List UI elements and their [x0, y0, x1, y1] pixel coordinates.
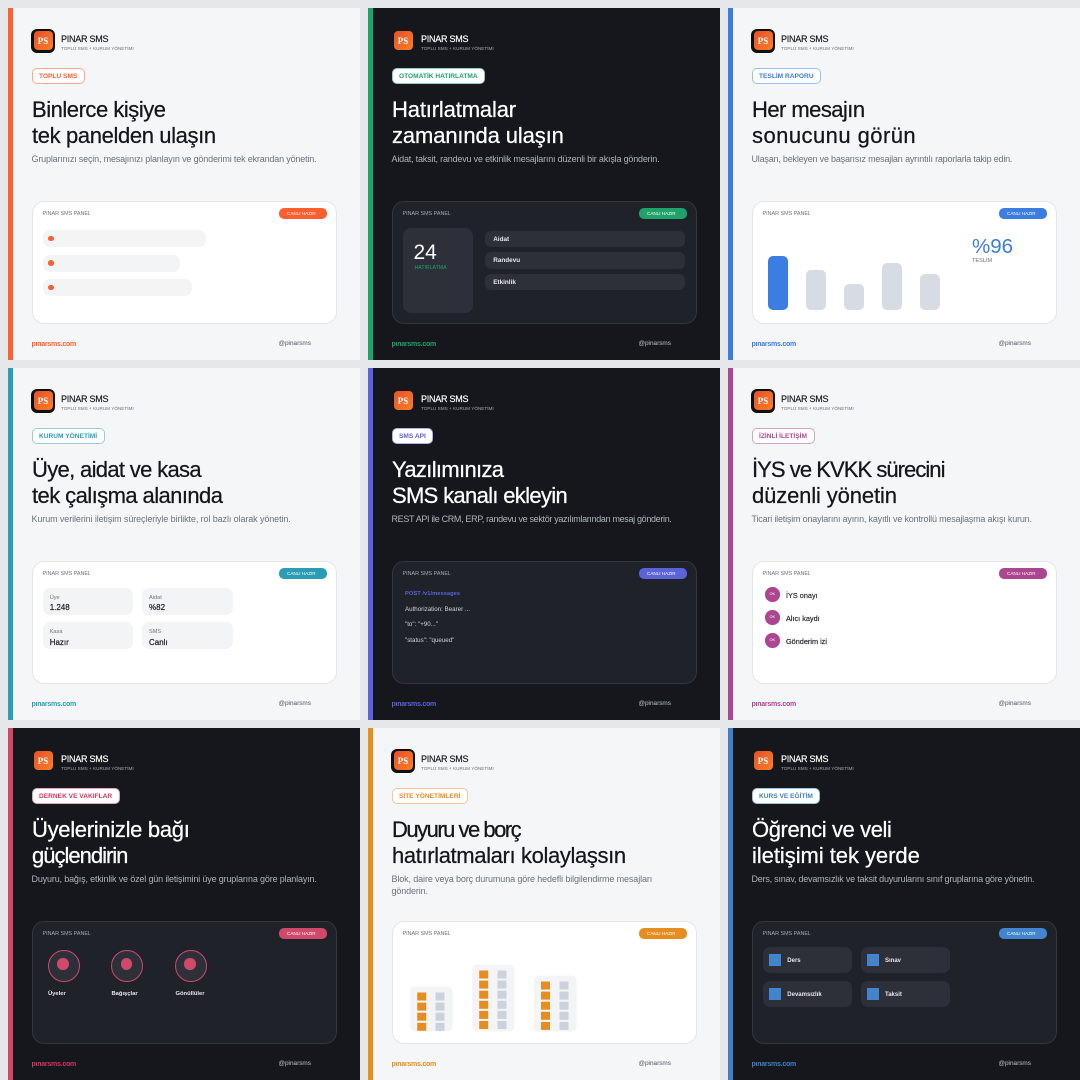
social handle: @pinarsms	[638, 340, 671, 347]
heading: Üye, aidat ve kasa	[32, 457, 201, 482]
heading	[752, 817, 920, 868]
panel: delivery chart	[752, 200, 1056, 324]
reminder counter: 24	[414, 241, 437, 264]
topic: taksit	[861, 981, 950, 1007]
code: authorization: Authorization: Bearer ...	[405, 606, 470, 612]
heading: hatırlatmaları kolaylaşsın	[392, 843, 626, 868]
logo: PS	[398, 36, 408, 46]
logo	[391, 748, 415, 772]
group icon 1	[48, 950, 80, 982]
stat: uye: Üye	[50, 595, 60, 601]
heading: güçlendirin	[32, 843, 127, 868]
tag: İZİNLİ İLETİŞİM	[759, 433, 807, 440]
building 1	[410, 986, 452, 1031]
reminder row: etkinlik	[485, 274, 685, 290]
check icon 3: OK	[770, 638, 775, 642]
heading	[392, 457, 567, 508]
tag	[392, 788, 468, 804]
brand subtitle: TOPLU SMS + KURUM YÖNETİMİ	[61, 406, 134, 410]
tag	[392, 428, 433, 444]
card: site yonetimleri	[368, 728, 720, 1080]
stat: aidat: %82	[149, 603, 165, 612]
heading: tek çalışma alanında	[32, 483, 222, 508]
description: Ders, sınav, devamsızlık ve taksit duyurularını sınıf gruplarına göre yönetin.	[752, 874, 1034, 884]
brand name: PINAR SMS	[61, 394, 108, 404]
tag: OTOMATİK HATIRLATMA	[399, 73, 478, 80]
status badge: CANLI HAZIR	[287, 930, 316, 936]
brand subtitle: TOPLU SMS + KURUM YÖNETİMİ	[781, 766, 854, 770]
description: Ticari iletişim onaylarını ayırın, kayıtlı ve kontrollü mesajlaşma akışı kurun.	[752, 514, 1032, 524]
card: dernek ve vakiflar	[8, 728, 360, 1080]
card: toplu sms	[8, 8, 360, 360]
list row 1	[43, 230, 206, 247]
heading: Hatırlatmalar	[392, 97, 516, 122]
code: recipient: "to": "+90..."	[405, 621, 438, 628]
logo: PS	[398, 756, 408, 766]
card: kurum yonetimi	[8, 368, 360, 720]
heading: SMS kanalı ekleyin	[392, 483, 567, 508]
list row 3	[43, 279, 192, 296]
description: Duyuru, bağış, etkinlik ve özel gün iletişimini üye gruplarına göre planlayın.	[32, 874, 317, 884]
status badge: CANLI HAZIR	[1007, 210, 1036, 216]
tag	[32, 428, 105, 444]
website: pınarsms.com	[32, 700, 76, 708]
panel label: PINAR SMS PANEL	[762, 571, 811, 577]
website: pınarsms.com	[752, 1060, 796, 1068]
brand name: PINAR SMS	[421, 754, 468, 764]
tag: TOPLU SMS	[39, 73, 77, 80]
brand subtitle: TOPLU SMS + KURUM YÖNETİMİ	[421, 766, 494, 770]
group label 3: Gönüllüler	[176, 991, 204, 997]
heading: Duyuru ve borç	[392, 817, 520, 842]
social handle: @pinarsms	[638, 1060, 671, 1067]
status badge	[639, 928, 686, 938]
brand subtitle: TOPLU SMS + KURUM YÖNETİMİ	[781, 46, 854, 50]
brand subtitle: TOPLU SMS + KURUM YÖNETİMİ	[421, 406, 494, 410]
tag	[752, 68, 821, 84]
check icon 1	[765, 587, 780, 602]
status badge: CANLI HAZIR	[287, 570, 316, 576]
group label 2: Bağışçlar	[112, 991, 138, 997]
tag: KURUM YÖNETİMİ	[39, 433, 97, 440]
social handle: @pinarsms	[638, 700, 671, 707]
panel: buildings	[392, 920, 696, 1044]
website: pınarsms.com	[392, 1060, 436, 1068]
tag	[752, 428, 814, 444]
check icon 2: OK	[770, 615, 775, 619]
status badge: CANLI HAZIR	[1007, 930, 1036, 936]
topic: sinav: Sınav	[885, 958, 901, 964]
website: pınarsms.com	[32, 340, 76, 348]
description: Ulaşan, bekleyen ve başarısız mesajları ayrıntılı raporlarla takip edin.	[752, 154, 1012, 164]
heading	[32, 457, 224, 508]
brand name: PINAR SMS	[781, 754, 828, 764]
logo: PS	[38, 756, 48, 766]
building 3	[534, 975, 576, 1031]
heading: Binlerce kişiye	[32, 97, 166, 122]
description: Blok, daire veya borç durumuna göre hedefli bilgilendirme mesajları	[392, 874, 652, 884]
code: status: "status": "queued"	[405, 637, 454, 644]
status badge: CANLI HAZIR	[1007, 570, 1036, 576]
check icon 3	[765, 633, 780, 648]
reminder counter: HATIRLATMA	[414, 264, 447, 270]
heading	[752, 97, 916, 148]
status badge	[279, 928, 326, 938]
topic: devamsizlik	[763, 981, 852, 1007]
social handle: @pinarsms	[998, 1060, 1031, 1067]
heading: Öğrenci ve veli	[752, 817, 892, 842]
heading	[32, 97, 216, 148]
stat: uye	[43, 588, 133, 615]
stat: kasa: Kasa	[50, 629, 62, 635]
logo: PS	[758, 396, 768, 406]
panel: topics	[752, 920, 1056, 1044]
description: Aidat, taksit, randevu ve etkinlik mesajlarını düzenli bir akışla gönderin.	[392, 154, 659, 164]
heading: tek panelden ulaşın	[32, 123, 216, 148]
heading	[392, 97, 564, 148]
card: sms api	[368, 368, 720, 720]
tag	[32, 68, 85, 84]
panel label: PINAR SMS PANEL	[762, 211, 811, 217]
reminder row: randevu	[485, 252, 685, 268]
bar 3	[844, 284, 864, 310]
logo	[391, 388, 415, 412]
reminder row: randevu: Randevu	[493, 257, 520, 264]
heading	[392, 817, 626, 868]
brand subtitle: TOPLU SMS + KURUM YÖNETİMİ	[61, 46, 134, 50]
panel: api code	[392, 560, 696, 684]
heading	[32, 817, 190, 868]
status badge	[999, 208, 1046, 218]
brand subtitle: TOPLU SMS + KURUM YÖNETİMİ	[61, 766, 134, 770]
heading: Her mesajın	[752, 97, 865, 122]
social handle: @pinarsms	[278, 1060, 311, 1067]
bar 2	[806, 270, 826, 310]
topic: ders: Ders	[787, 958, 801, 964]
panel label: PINAR SMS PANEL	[42, 211, 91, 217]
logo	[751, 388, 775, 412]
topic: taksit: Taksit	[885, 992, 902, 998]
panel label: PINAR SMS PANEL	[402, 931, 451, 937]
card: kurs ve egitim	[728, 728, 1080, 1080]
brand name: PINAR SMS	[781, 34, 828, 44]
status badge	[639, 208, 686, 218]
heading: düzenli yönetin	[752, 483, 897, 508]
tag: DERNEK VE VAKIFLAR	[39, 793, 112, 800]
code: endpoint: POST /v1/messages	[405, 591, 460, 597]
tag	[752, 788, 820, 804]
topic: sinav	[861, 947, 950, 973]
logo	[751, 748, 775, 772]
card: otomatik hatirlatma	[368, 8, 720, 360]
panel: message list	[32, 200, 336, 324]
card: teslim raporu	[728, 8, 1080, 360]
bar 4	[882, 263, 902, 310]
tag	[32, 788, 120, 804]
panel label: PINAR SMS PANEL	[402, 571, 451, 577]
group icon 3	[174, 950, 206, 982]
description: Gruplarınızı seçin, mesajınızı planlayın ve gönderimi tek ekrandan yönetin.	[32, 154, 316, 164]
group icon 2	[111, 950, 143, 982]
topic: ders	[763, 947, 852, 973]
brand subtitle: TOPLU SMS + KURUM YÖNETİMİ	[421, 46, 494, 50]
description: REST API ile CRM, ERP, randevu ve sektör yazılımlarından mesaj gönderin.	[392, 514, 672, 524]
logo	[391, 28, 415, 52]
status badge	[999, 568, 1046, 578]
logo: PS	[38, 396, 48, 406]
brand name: PINAR SMS	[61, 34, 108, 44]
logo	[31, 748, 55, 772]
website: pınarsms.com	[392, 340, 436, 348]
status badge: CANLI HAZIR	[647, 210, 676, 216]
status badge: CANLI HAZIR	[287, 210, 316, 216]
heading	[752, 457, 945, 508]
reminder row: aidat	[485, 230, 685, 247]
reminder row: etkinlik: Etkinlik	[493, 278, 516, 286]
logo: PS	[758, 756, 768, 766]
social handle: @pinarsms	[278, 340, 311, 347]
website: pınarsms.com	[392, 700, 436, 708]
brand name: PINAR SMS	[421, 394, 468, 404]
tag: KURS VE EĞİTİM	[759, 793, 813, 800]
heading: iletişimi tek yerde	[752, 843, 920, 868]
check label 2: Alıcı kaydı	[786, 614, 820, 623]
website: pınarsms.com	[752, 700, 796, 708]
heading: Üyelerinizle bağı	[32, 817, 190, 842]
group label 1: Üyeler	[48, 991, 66, 997]
panel: checklist	[752, 560, 1056, 684]
status badge	[279, 208, 326, 218]
description	[392, 874, 652, 896]
delivery rate: %96	[972, 234, 1013, 258]
building illustration	[410, 964, 576, 1032]
status badge: CANLI HAZIR	[647, 570, 676, 576]
topic: devamsizlik: Devamsızlık	[787, 992, 822, 998]
panel label: PINAR SMS PANEL	[42, 931, 91, 937]
social handle: @pinarsms	[278, 700, 311, 707]
status badge	[639, 568, 686, 578]
panel label: PINAR SMS PANEL	[762, 931, 811, 937]
stat: aidat: Aidat	[149, 595, 162, 601]
stat: kasa	[43, 622, 133, 649]
heading: İYS ve KVKK sürecini	[752, 457, 945, 482]
stat: uye: 1.248	[50, 603, 70, 612]
stat: aidat	[142, 588, 232, 615]
panel: stats	[32, 560, 336, 684]
social handle: @pinarsms	[998, 340, 1031, 347]
building 2	[472, 964, 514, 1031]
check icon 2	[765, 610, 780, 624]
card: izinli iletisim	[728, 368, 1080, 720]
delivery label: TESLİM	[972, 258, 992, 264]
logo: PS	[758, 36, 768, 46]
brand name: PINAR SMS	[61, 754, 108, 764]
brand name: PINAR SMS	[781, 394, 828, 404]
list row 2	[43, 254, 180, 272]
heading: sonucunu görün	[752, 123, 916, 148]
brand subtitle: TOPLU SMS + KURUM YÖNETİMİ	[781, 406, 854, 410]
reminder counter	[403, 228, 473, 313]
check icon 1: OK	[770, 592, 775, 596]
website: pınarsms.com	[32, 1060, 76, 1068]
panel label: PINAR SMS PANEL	[402, 211, 451, 217]
status badge: CANLI HAZIR	[647, 930, 676, 936]
social handle: @pinarsms	[998, 700, 1031, 707]
stat: sms	[142, 622, 232, 649]
tag: SİTE YÖNETİMLERİ	[399, 793, 460, 800]
check label 1: İYS onayı	[786, 591, 818, 600]
tag: TESLİM RAPORU	[759, 73, 814, 80]
logo: PS	[38, 36, 48, 46]
logo	[31, 28, 55, 52]
bar 5	[920, 274, 940, 310]
bar 1	[768, 256, 788, 310]
tag: SMS API	[399, 433, 426, 440]
logo	[31, 388, 55, 412]
panel label: PINAR SMS PANEL	[42, 571, 91, 577]
description: Kurum verilerini iletişim süreçleriyle birlikte, rol bazlı olarak yönetin.	[32, 514, 291, 524]
check label 3: Gönderim izi	[786, 637, 827, 646]
panel: reminders	[392, 200, 696, 324]
description: gönderin.	[392, 886, 428, 896]
logo: PS	[398, 396, 408, 406]
tag	[392, 68, 485, 84]
panel: groups	[32, 920, 336, 1044]
logo	[751, 28, 775, 52]
heading: Yazılımınıza	[392, 457, 503, 482]
status badge	[279, 568, 326, 578]
stat: sms: SMS	[149, 629, 161, 635]
stat: kasa: Hazır	[50, 638, 69, 646]
website: pınarsms.com	[752, 340, 796, 348]
heading: zamanında ulaşın	[392, 123, 564, 148]
brand name: PINAR SMS	[421, 34, 468, 44]
reminder row: aidat: Aidat	[493, 236, 509, 242]
stat: sms: Canlı	[149, 638, 168, 646]
status badge	[999, 928, 1046, 938]
